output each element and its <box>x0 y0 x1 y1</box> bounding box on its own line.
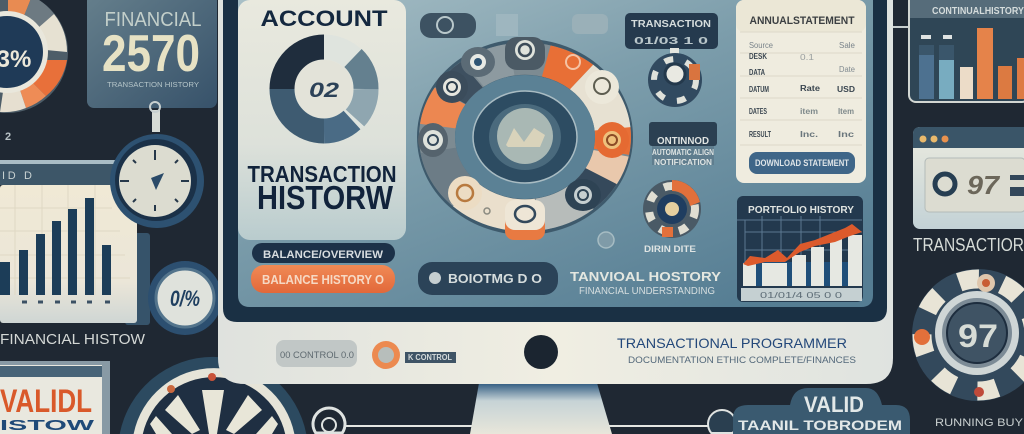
icon: wheel <box>120 357 306 434</box>
table rows: Item <box>838 107 854 116</box>
centre lens <box>473 91 577 183</box>
screen panel <box>238 0 873 307</box>
table rows: item <box>800 107 818 116</box>
panel: account card: HISTORW <box>257 179 394 216</box>
icon: small marker <box>598 232 614 248</box>
panel: valid history <box>0 361 110 434</box>
caption: transactional history: FINANCIAL UNDERSTANDING <box>579 286 715 297</box>
caption: financial history: FINANCIAL HISTOW <box>0 331 146 348</box>
panel: valid history: ISTOW <box>0 417 96 434</box>
label: dark middle tag: ONTINNOD <box>657 136 709 147</box>
panel: account card: 02 <box>309 79 339 102</box>
panel: valid history: VALIDL <box>0 383 92 419</box>
bezel: transactional caption <box>617 335 856 365</box>
tag: valid <box>708 388 910 434</box>
table rows: Date <box>839 65 856 74</box>
label: dark middle tag: AUTOMATIC ALIGN <box>652 148 714 157</box>
table rows: Source <box>749 41 774 50</box>
label: dark top tag: 01/03 1 0 <box>634 36 709 47</box>
label: dark top tag: TRANSACTION <box>631 19 711 30</box>
chip: top-left percentage <box>0 0 68 113</box>
table heading: ANNUALSTATEMENT <box>750 15 855 27</box>
panel: transactions table: DOWNLOAD STATEMENT <box>755 158 849 168</box>
table rows: Sale <box>839 41 856 50</box>
bezel: controls <box>276 340 456 369</box>
table rows: Inc. <box>800 130 818 139</box>
button: orange pill <box>251 265 395 293</box>
card: financial figure: 2570 <box>102 25 200 83</box>
table rows: DATES <box>749 107 767 116</box>
ring inner well <box>455 75 595 199</box>
decorative mark: small digit: 2 <box>5 131 11 143</box>
tag: valid: VALID <box>804 392 864 417</box>
connector line <box>313 408 710 433</box>
heading: transaction history: TRANSACTION <box>248 161 396 187</box>
table rows: DATUM <box>749 85 769 94</box>
heading: account: ACCOUNT <box>260 6 388 31</box>
donut chart <box>282 47 366 131</box>
panel: top-right bars <box>893 0 1024 102</box>
panel: bar chart: ID D <box>2 170 32 182</box>
bezel: transactional caption: DOCUMENTATION ETHIC COMPLETE/FINANCES <box>628 355 856 365</box>
label: dark middle tag: NOTIFICATION <box>654 158 712 167</box>
bar axis ticks <box>22 300 110 304</box>
icon: clock <box>110 102 204 228</box>
chart footer <box>741 288 862 301</box>
table rows <box>740 32 862 145</box>
table rows: Inc <box>838 130 855 139</box>
monitor bezel <box>218 0 893 384</box>
caption: transactional history <box>570 269 721 297</box>
card: financial figure: FINANCIAL <box>104 9 202 31</box>
chip: small dial upper <box>648 48 702 107</box>
ring dial <box>401 26 649 248</box>
table rows: RESULT <box>749 130 771 139</box>
button: orange pill: BALANCE HISTORY O <box>262 272 384 287</box>
caption: bottom right: RUNNING BUY <box>935 417 1024 429</box>
button: dark pill <box>252 243 395 263</box>
bezel: controls: K CONTROL <box>408 353 452 362</box>
bezel: transactional caption: TRANSACTIONAL PROGRAMMER <box>617 335 847 351</box>
card: financial figure: TRANSACTION HISTORY <box>107 82 199 89</box>
table rows: 0.1 <box>800 53 815 62</box>
panel: browser window <box>913 127 1024 229</box>
bars <box>0 198 111 295</box>
icon group: top tabs <box>420 13 608 38</box>
table button <box>749 152 855 174</box>
table rows: USD <box>837 85 855 94</box>
chip: lower right 97 <box>906 263 1024 407</box>
monitor stand <box>470 383 612 434</box>
label: dark top tag <box>625 13 718 49</box>
ring buttons <box>418 37 629 240</box>
panel: portfolio chart: 01/01/4 05 0 0 <box>760 291 843 300</box>
table rows: DATA <box>749 68 765 77</box>
button: dark status pill: BOIOTMG D O <box>448 271 542 286</box>
panel: portfolio chart: PORTFOLIO HISTORY <box>748 205 854 216</box>
panel: account card <box>238 0 406 240</box>
card: financial figure <box>87 0 217 108</box>
chip: small dial lower <box>643 180 701 238</box>
panel: bar chart <box>0 160 150 325</box>
panel: transactions table <box>736 0 866 183</box>
panel: portfolio chart <box>737 196 863 302</box>
caption: chip label: DIRIN DITE <box>644 244 696 254</box>
chart trend line <box>743 224 862 266</box>
panel: browser window: 97 <box>967 170 1001 200</box>
badge: small round: 0/% <box>170 286 200 311</box>
bezel: controls: 00 CONTROL 0.0 <box>280 350 354 360</box>
ring base <box>417 39 633 235</box>
table rows: Rate <box>800 84 821 93</box>
monitor <box>218 0 893 434</box>
table rows: DESK <box>749 52 767 61</box>
monitor screen frame <box>223 0 887 322</box>
label: dark middle tag <box>649 122 717 167</box>
chip: lower right 97: 97 <box>958 318 998 354</box>
monitor camera button <box>524 335 558 369</box>
badge: small round <box>148 261 222 335</box>
button: dark pill: BALANCE/OVERVIEW <box>263 249 384 261</box>
caption: transactional history: TANVIOAL HOSTORY <box>570 269 721 284</box>
button: dark status pill <box>418 262 558 295</box>
chart bars <box>743 262 862 286</box>
tag: valid: TAANIL TOBRODEM <box>738 417 902 433</box>
